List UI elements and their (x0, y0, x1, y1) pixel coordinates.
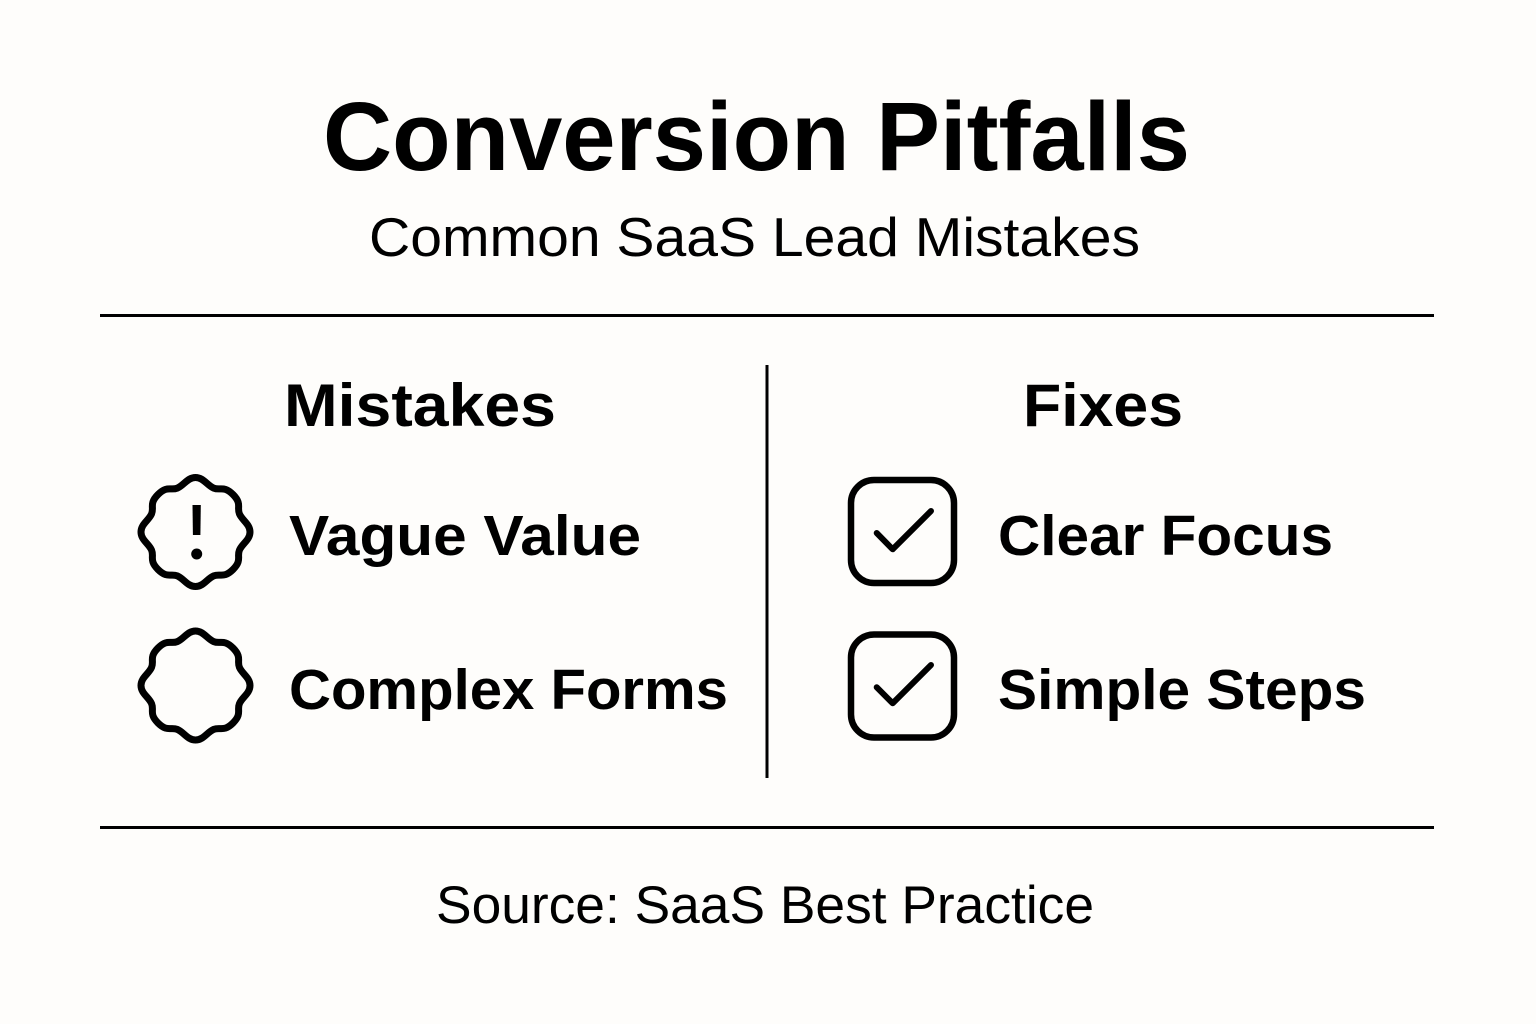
source note: Source: SaaS Best Practice (436, 876, 1094, 935)
subtitle: Common SaaS Lead Mistakes (369, 206, 1140, 268)
panel: fixes (851, 372, 1366, 738)
label: vague value: Vague Value (289, 504, 641, 568)
icon: warning badge (141, 478, 250, 586)
label: simple steps: Simple Steps (998, 658, 1366, 722)
icon: checkbox two (851, 634, 954, 738)
label: clear focus: Clear Focus (998, 504, 1333, 568)
heading: fixes: Fixes (1023, 372, 1183, 439)
icon: empty badge (141, 631, 250, 740)
label: complex forms: Complex Forms (289, 658, 728, 722)
heading: mistakes: Mistakes (284, 372, 556, 439)
title: Conversion Pitfalls (323, 82, 1190, 191)
icon: checkbox one (851, 480, 954, 583)
panel: mistakes (141, 372, 728, 740)
